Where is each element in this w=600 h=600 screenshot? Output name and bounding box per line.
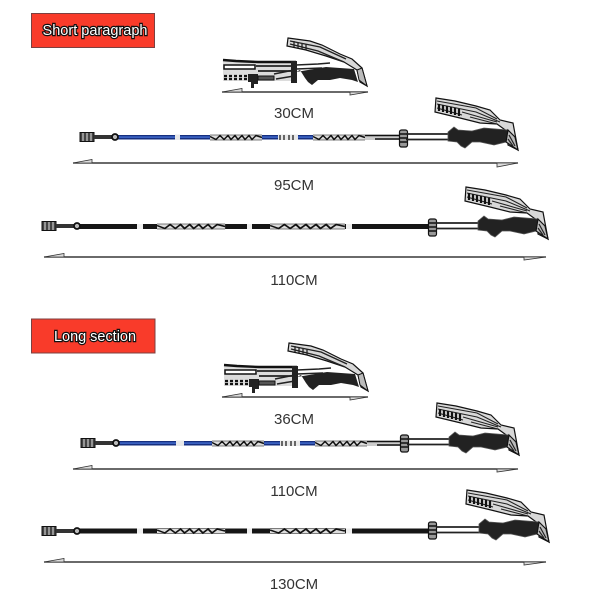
dimension arrow: 130cm <box>44 558 546 565</box>
dimension arrow: 30cm <box>222 88 368 95</box>
dimension label: 130CM: 130CM <box>270 576 318 593</box>
pole: black extended, 110cm <box>42 187 548 239</box>
section label: long section: Long section <box>54 328 136 345</box>
dimension label: 110CM: 110CM <box>270 483 318 500</box>
dimension arrow: 95cm <box>73 160 518 167</box>
pole: blue extended, 110cm <box>81 403 519 455</box>
section label: long section <box>32 319 155 353</box>
dimension arrow: 36cm <box>222 394 368 400</box>
pole: black extended, 130cm <box>42 490 549 542</box>
dimension label: 30CM: 30CM <box>274 105 314 122</box>
pole: collapsed long section, 36cm <box>224 343 368 393</box>
dimension label: 110CM: 110CM <box>270 272 318 289</box>
section label: short paragraph: Short paragraph <box>42 22 148 39</box>
dimension label: 95CM: 95CM <box>274 177 314 194</box>
dimension label: 36CM: 36CM <box>274 411 314 428</box>
dimension arrow: 110cm <box>73 466 518 472</box>
pole: collapsed short section, 30cm <box>223 38 367 88</box>
dimension arrow: 110cm <box>44 254 546 260</box>
section label: short paragraph <box>32 14 154 48</box>
pole: blue extended, 95cm <box>80 98 518 150</box>
